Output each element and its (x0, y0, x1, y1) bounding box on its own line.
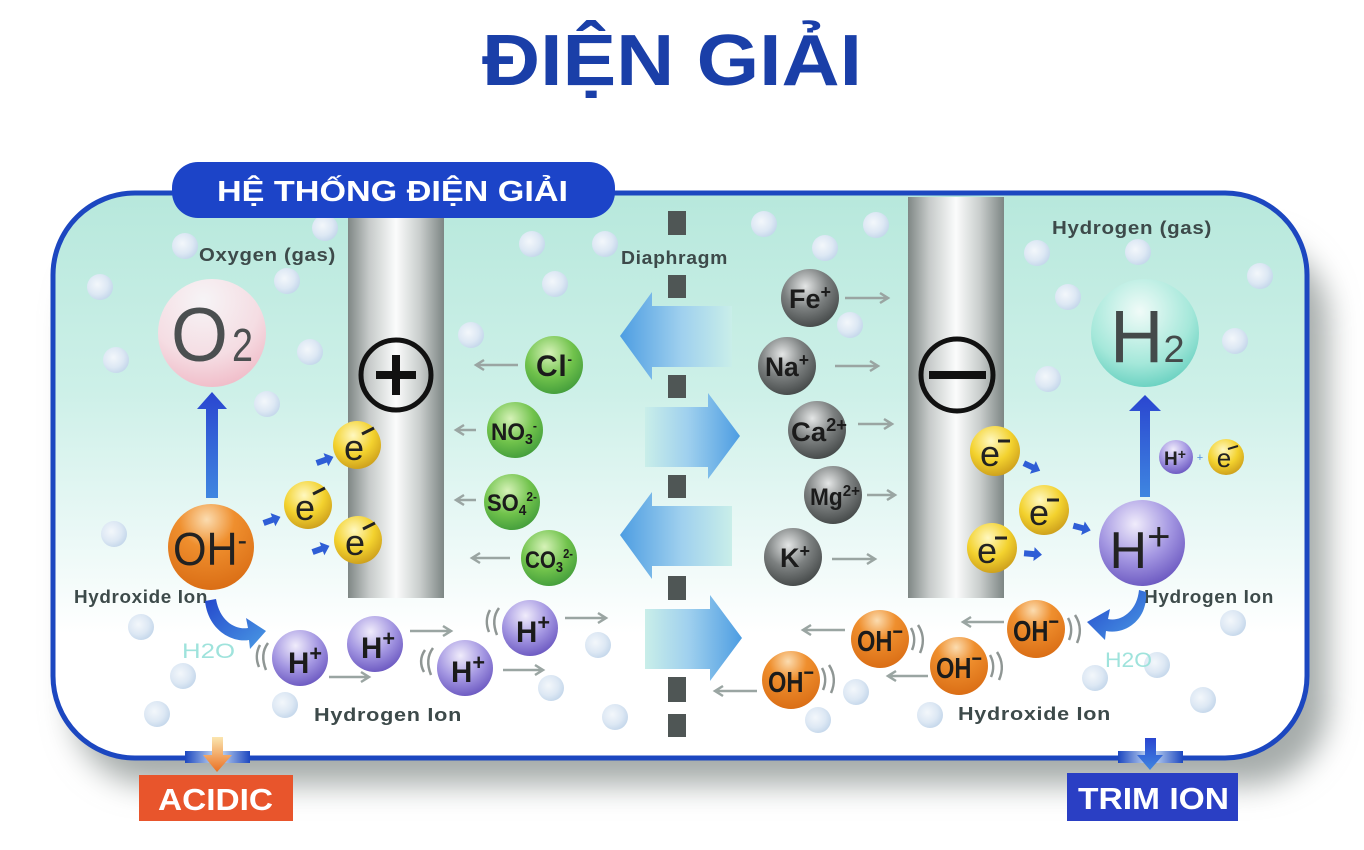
label: trim ion (1067, 773, 1238, 821)
O2 molecule: 2 (232, 319, 253, 371)
electron 2: e (295, 487, 315, 528)
H2 molecule (1091, 279, 1199, 387)
H+ and e- small: H (1164, 449, 1178, 470)
H+ ion 2: H (361, 632, 383, 665)
curved arrow left (205, 599, 266, 649)
right outlet connector (1118, 751, 1183, 763)
H+ and e- small: e (1217, 443, 1231, 473)
anion: SO4: 2- (526, 489, 537, 504)
OH- ion 4: − (804, 660, 814, 685)
OH- ion left (168, 504, 254, 590)
cation: K: + (799, 541, 810, 561)
anion: NO3: - (533, 418, 537, 433)
anion: Cl (525, 336, 583, 394)
electron 1 (970, 426, 1020, 476)
small blue arrows right (1021, 457, 1093, 562)
OH- ion left: OH (173, 523, 242, 575)
hydroxide label bottom: Hydroxide Ion (958, 704, 1111, 724)
H+ ion 1: H (288, 647, 310, 680)
cation: Mg (804, 466, 862, 524)
anion: CO3: CO (525, 547, 561, 574)
electrons right (967, 426, 1069, 573)
anion: SO4: 4 (519, 502, 527, 519)
blue arrow (1137, 738, 1163, 770)
OH- ion 2: − (893, 619, 903, 644)
panel: electrolysis system (53, 193, 1328, 785)
H+ and e- small (1159, 439, 1244, 475)
label: trim ion: TRIM ION (1078, 781, 1229, 816)
left outlet connector (185, 751, 250, 763)
H+ cluster (272, 600, 558, 696)
electron 3 (967, 523, 1017, 573)
H+ ion 3 (437, 640, 493, 696)
OH- ion 1: − (1049, 609, 1059, 634)
curved arrow right (1087, 590, 1146, 640)
hydrogen ion label bottom: Hydrogen Ion (314, 705, 462, 725)
hydroxide label left: Hydroxide Ion (74, 587, 208, 607)
large arrow left 2 (620, 492, 732, 579)
cation: Na: Na (765, 352, 800, 382)
anion: SO4: SO (487, 490, 522, 517)
H+ ion 1: + (309, 641, 322, 666)
cation: Na (758, 337, 816, 395)
anion: CO3 (521, 530, 577, 586)
anion: NO3: 3 (525, 431, 533, 448)
cation: Mg: Mg (810, 484, 845, 511)
small blue arrows left (261, 450, 336, 559)
cation arrows (832, 293, 895, 564)
cation: Mg: 2+ (843, 483, 860, 500)
OH- ion 1 (1007, 600, 1065, 658)
electron 3: e (345, 522, 365, 563)
OH- arrows (715, 617, 1004, 696)
H2O label right: H2O (1105, 649, 1152, 672)
anion: CO3: 2- (563, 546, 573, 561)
O2 molecule: O (171, 293, 228, 378)
oxygen label: Oxygen (gas) (199, 245, 336, 265)
cation: Ca: 2+ (826, 415, 847, 435)
H+ ion 3: + (472, 650, 485, 675)
cation: Ca (788, 401, 847, 459)
H2O label left: H2O (182, 640, 235, 663)
cation: Fe (781, 269, 839, 327)
H+ and e- small: + (1178, 446, 1186, 462)
H+ arrows (329, 613, 606, 682)
orange arrow (203, 737, 232, 772)
positive electrode (348, 195, 444, 598)
cation: K: K (780, 543, 800, 573)
H+ ion right: + (1147, 515, 1170, 559)
electron 1: e (344, 427, 364, 468)
negative electrode (908, 197, 1004, 598)
large arrow left 1 (620, 292, 732, 380)
H+ ion 4 (502, 600, 558, 656)
electron 2: e (1029, 492, 1049, 533)
anion: Cl: Cl (536, 350, 567, 383)
large arrow right 2 (645, 595, 742, 681)
anion: Cl: - (567, 351, 572, 367)
H+ ion 1 (272, 630, 328, 686)
electrons left (284, 421, 382, 564)
heading pill: HỆ THỐNG ĐIỆN GIẢI (217, 174, 568, 208)
heading pill (172, 162, 615, 218)
OH- motion marks (822, 615, 1080, 693)
OH- cluster (762, 600, 1065, 709)
anion: NO3 (487, 402, 543, 458)
H+ ion 4: + (537, 610, 550, 635)
OH- ion 3: − (972, 646, 982, 671)
OH- ion 4 (762, 651, 820, 709)
electron 1 (333, 421, 381, 469)
electron 3 (334, 516, 382, 564)
large arrow right 1 (645, 393, 740, 479)
diaphragm label: Diaphragm (621, 248, 728, 268)
label: acidic (139, 775, 293, 821)
H+ ion right (1099, 500, 1185, 586)
arrow up to H2 (1129, 395, 1161, 497)
electron 2 (1019, 485, 1069, 535)
hydrogen gas label: Hydrogen (gas) (1052, 218, 1212, 238)
H+ ion 2: + (382, 626, 395, 651)
arrow up to O2 (197, 392, 227, 498)
cation: Fe: + (820, 282, 831, 302)
title: ĐIỆN GIẢI (482, 20, 862, 101)
H+ ion right: H (1110, 522, 1147, 580)
electron 2 (284, 481, 332, 529)
panel body (53, 193, 1307, 758)
cation: Ca: Ca (791, 417, 826, 447)
water bubbles (87, 211, 1273, 733)
OH- ion 4: OH (768, 667, 812, 699)
cation: Fe: Fe (789, 284, 821, 314)
electron 1: e (980, 433, 1000, 474)
hydrogen ion label right: Hydrogen Ion (1144, 587, 1274, 607)
cation: Na: + (799, 350, 809, 370)
H+ motion marks (257, 608, 499, 675)
OH- ion 3 (930, 637, 988, 695)
OH- ion left: - (238, 524, 247, 557)
anion arrows (456, 360, 518, 563)
anion: NO3: NO (491, 419, 527, 446)
H+ ion 2 (347, 616, 403, 672)
OH- ion 3: OH (936, 653, 980, 685)
diaphragm (668, 211, 686, 737)
anion: SO4 (484, 474, 540, 530)
OH- ion 2 (851, 610, 909, 668)
O2 molecule (158, 279, 266, 387)
H+ ion 3: H (451, 656, 473, 689)
H2 molecule: H2 (1110, 295, 1185, 378)
panel shadow (72, 240, 1328, 785)
H+ ion 4: H (516, 616, 538, 649)
cation: K (764, 528, 822, 586)
OH- ion 2: OH (857, 626, 900, 658)
OH- ion 1: OH (1013, 616, 1056, 648)
anion: CO3: 3 (556, 559, 563, 576)
label: acidic: ACIDIC (158, 782, 273, 817)
H+ and e- small: + (1197, 452, 1203, 464)
electron 3: e (977, 530, 997, 571)
